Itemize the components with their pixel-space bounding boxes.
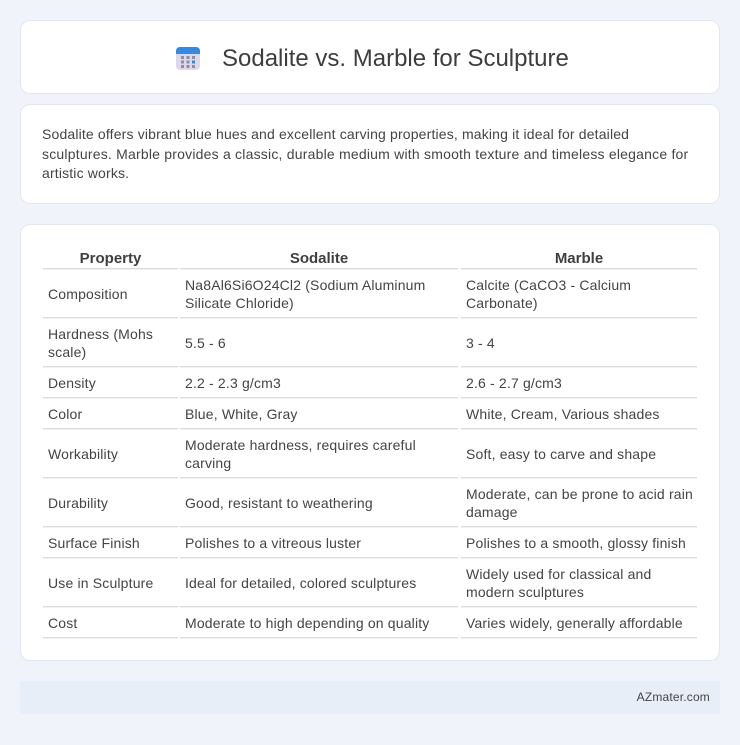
footer text: AZmater.com xyxy=(637,690,710,704)
comparison table: Color xyxy=(48,406,82,422)
comparison table: 3 - 4 xyxy=(466,335,495,351)
comparison table: carving xyxy=(185,455,231,471)
comparison table: Durability xyxy=(48,495,108,511)
comparison table: 2.2 - 2.3 g/cm3 xyxy=(185,375,281,391)
comparison table: Surface Finish xyxy=(48,535,140,551)
comparison table: Varies widely, generally affordable xyxy=(466,615,683,631)
summary text: sculptures. Marble provides a classic, durable medium with smooth texture and timeless elegance for xyxy=(42,146,688,162)
table panel xyxy=(20,224,720,661)
comparison table: Polishes to a vitreous luster xyxy=(185,535,361,551)
comparison table: modern sculptures xyxy=(466,584,584,600)
comparison table: Density xyxy=(48,375,96,391)
comparison table: Moderate, can be prone to acid rain xyxy=(466,486,693,502)
comparison table: Moderate hardness, requires careful xyxy=(185,437,416,453)
comparison table: Use in Sculpture xyxy=(48,575,153,591)
title panel xyxy=(20,20,720,94)
comparison table: Hardness (Mohs xyxy=(48,326,153,342)
comparison table: Moderate to high depending on quality xyxy=(185,615,429,631)
footer bar xyxy=(20,681,720,714)
comparison table: Silicate Chloride) xyxy=(185,295,294,311)
comparison table: Composition xyxy=(48,286,128,302)
icon: calendar xyxy=(176,47,200,70)
comparison table: scale) xyxy=(48,344,86,360)
title: Sodalite vs. Marble for Sculpture xyxy=(222,45,569,72)
comparison table: Widely used for classical and xyxy=(466,566,651,582)
comparison table: Ideal for detailed, colored sculptures xyxy=(185,575,416,591)
comparison table: damage xyxy=(466,504,518,520)
comparison table: Na8Al6Si6O24Cl2 (Sodium Aluminum xyxy=(185,277,425,293)
comparison table: Workability xyxy=(48,446,118,462)
comparison table: Polishes to a smooth, glossy finish xyxy=(466,535,686,551)
comparison table: Cost xyxy=(48,615,77,631)
comparison table: White, Cream, Various shades xyxy=(466,406,660,422)
summary text xyxy=(42,126,688,181)
summary text: artistic works. xyxy=(42,165,129,181)
comparison table: 2.6 - 2.7 g/cm3 xyxy=(466,375,562,391)
comparison table: Blue, White, Gray xyxy=(185,406,298,422)
summary text: Sodalite offers vibrant blue hues and excellent carving properties, making it ideal for detailed xyxy=(42,126,629,142)
comparison table: Property xyxy=(80,250,141,267)
comparison table: Carbonate) xyxy=(466,295,538,311)
comparison table: 5.5 - 6 xyxy=(185,335,226,351)
summary panel xyxy=(20,104,720,204)
comparison table: Soft, easy to carve and shape xyxy=(466,446,656,462)
comparison table: Sodalite xyxy=(290,250,348,267)
comparison table: Calcite (CaCO3 - Calcium xyxy=(466,277,631,293)
comparison table: Marble xyxy=(555,250,603,267)
comparison table: Good, resistant to weathering xyxy=(185,495,373,511)
